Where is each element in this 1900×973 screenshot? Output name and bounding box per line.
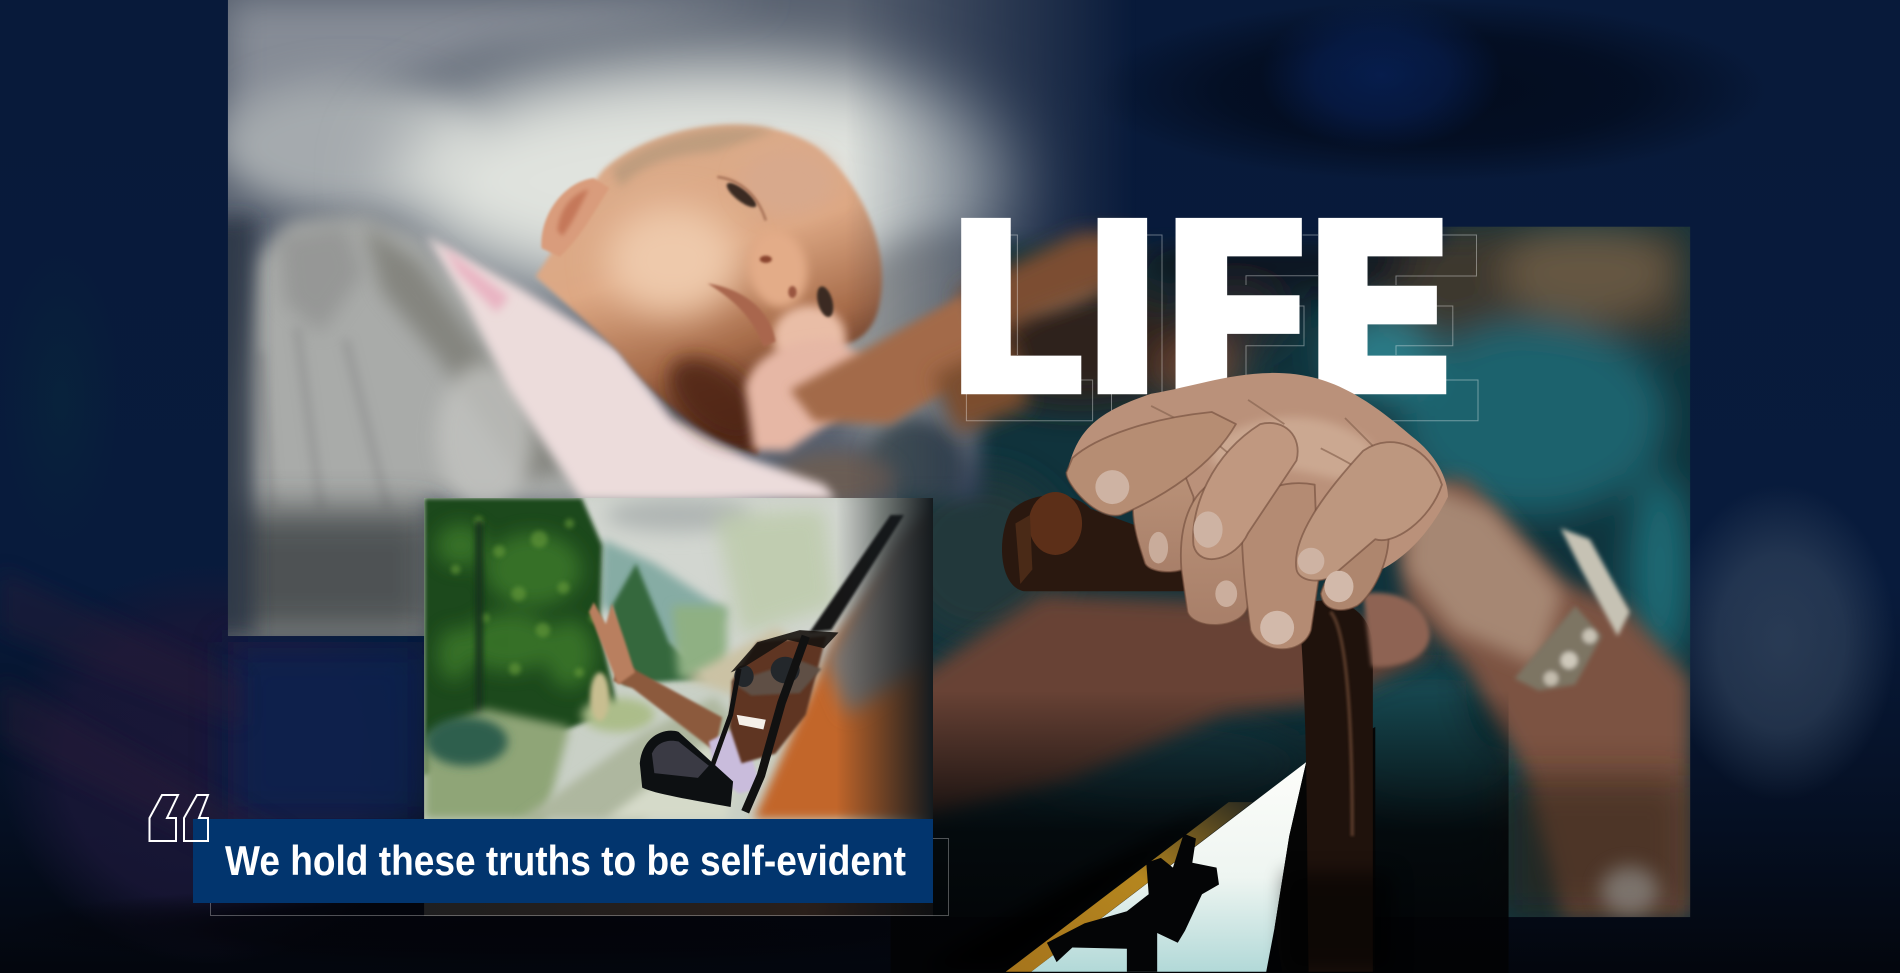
photo: elderly hands on cane: [897, 227, 1690, 917]
title: LIFE: L: [959, 172, 1076, 439]
watch: [1515, 528, 1630, 691]
title: LIFE: [959, 172, 1443, 440]
thumb below cane: [1363, 593, 1430, 667]
photo strip below banner: [424, 903, 933, 916]
mouth: [708, 284, 775, 347]
eyes: [725, 182, 758, 209]
fingers: [1066, 412, 1442, 649]
cane handle: [1002, 492, 1190, 591]
baby head: [536, 125, 882, 459]
road: [521, 697, 739, 819]
nose: [749, 236, 811, 312]
quote banner: [193, 819, 933, 903]
title: LIFE: I: [1096, 172, 1149, 439]
golden rock rim: [1006, 802, 1253, 972]
fingernails: [1091, 465, 1134, 509]
pale band behind title: [1028, 284, 1098, 318]
photo: woman in car window: [424, 498, 933, 819]
blurred adult finger and baby hand: [745, 233, 1133, 451]
sky and background trees: [588, 502, 856, 644]
photo: newborn baby: [200, 0, 1137, 636]
blanket: [200, 213, 788, 636]
quote banner outline: [210, 838, 948, 916]
woman: [589, 602, 838, 812]
car body: [754, 509, 933, 819]
climber scene: [921, 727, 1375, 972]
icon: quotation mark: [150, 795, 208, 841]
quote text: We hold these truths to be self-evident: [225, 837, 906, 884]
dark fade over lower photo: [891, 691, 1509, 973]
top hand over cane and title: [1066, 373, 1448, 649]
title: LIFE: E: [1317, 172, 1443, 439]
evergreen trees: [424, 498, 618, 775]
title outline frames: [966, 235, 1478, 421]
cane shaft: [1284, 600, 1393, 972]
title: LIFE: F: [1173, 173, 1298, 440]
ear: [541, 178, 609, 257]
lower forearm: [897, 594, 1430, 824]
right forearm and wrist: [1393, 479, 1690, 917]
pink shirt: [427, 236, 836, 499]
bushes: [424, 709, 569, 819]
climber silhouette: [1047, 834, 1219, 972]
baby cheek far side: [773, 305, 846, 368]
back of hand: [1069, 373, 1448, 569]
